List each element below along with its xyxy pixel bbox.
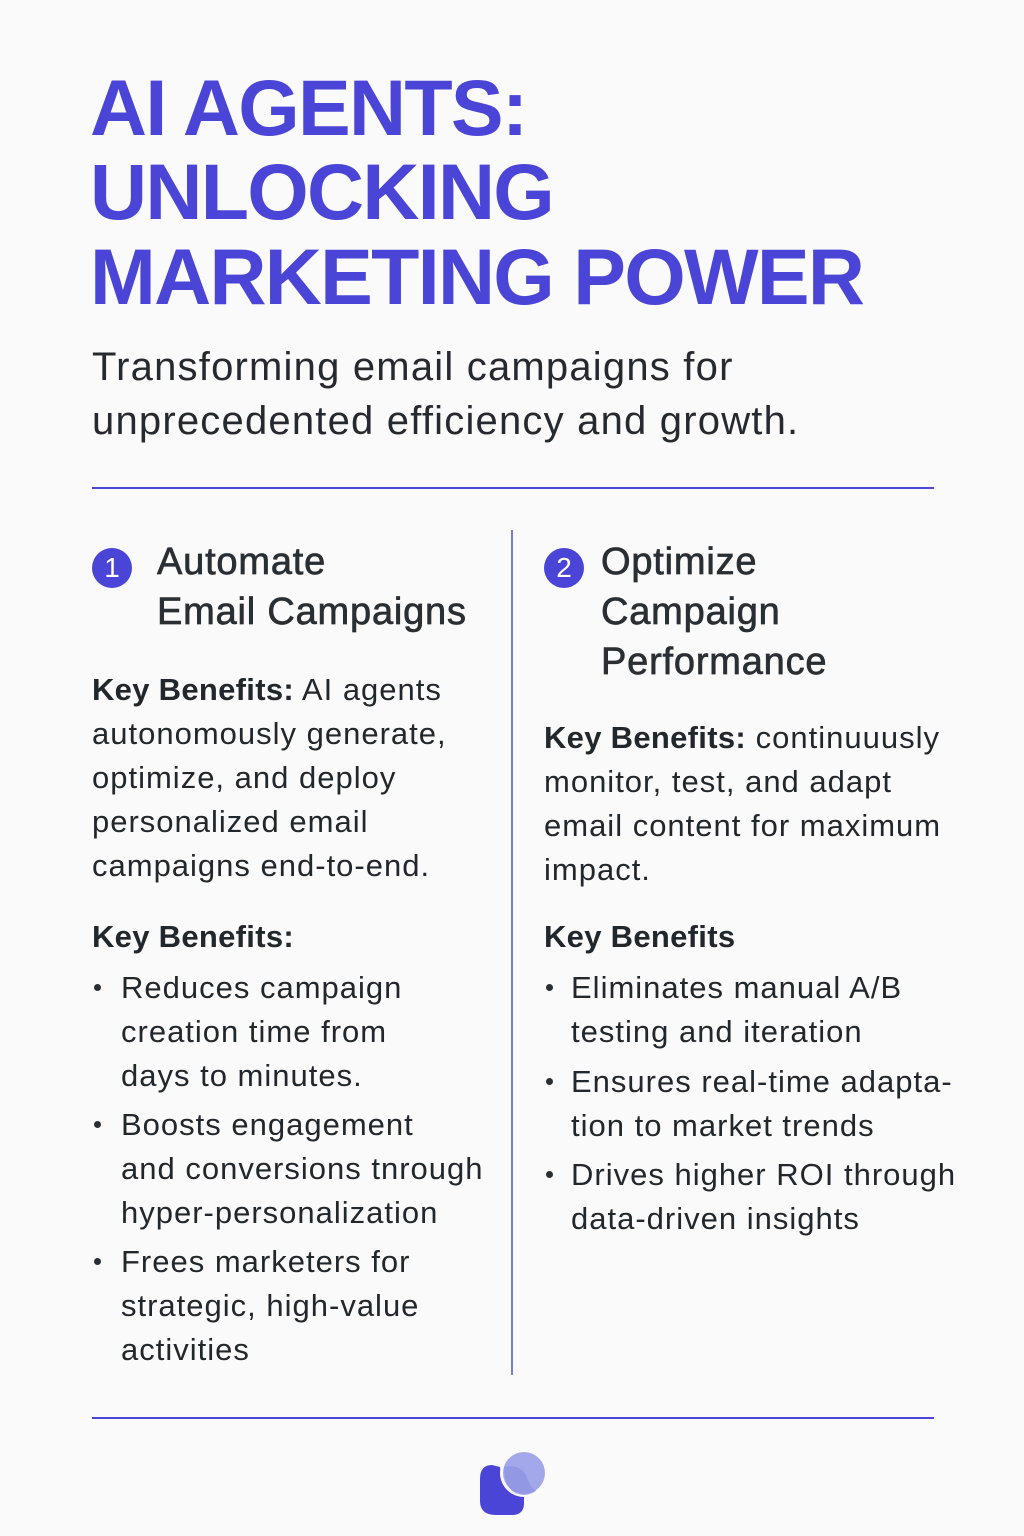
icon: logo bbox=[480, 1452, 545, 1515]
bullet list 2 bbox=[546, 970, 956, 1236]
icon: number 1: 1 bbox=[104, 552, 120, 583]
description 2 bbox=[544, 720, 941, 887]
bullet list 1: hyper-personalization bbox=[121, 1195, 438, 1230]
bullet list 2: testing and iteration bbox=[571, 1014, 863, 1049]
icon: number 2 bbox=[544, 548, 584, 588]
heading 2: Performance bbox=[601, 641, 827, 683]
bullet list 1: Reduces campaign bbox=[121, 970, 402, 1005]
description 1: campaigns end-to-end. bbox=[92, 848, 430, 883]
description 1: autonomously generate, bbox=[92, 716, 447, 751]
subtitle: unprecedented efficiency and growth. bbox=[92, 399, 799, 443]
description 2: Key Benefits: continuuusly bbox=[544, 720, 940, 755]
bullet list 1: and conversions tnrough bbox=[121, 1151, 484, 1186]
title: UNLOCKING bbox=[90, 147, 553, 236]
heading 2: Campaign bbox=[601, 591, 781, 633]
bullet list 1: strategic, high-value bbox=[121, 1288, 419, 1323]
description 2: email content for maximum bbox=[544, 808, 941, 843]
description 2: monitor, test, and adapt bbox=[544, 764, 892, 799]
subtitle: Transforming email campaigns for bbox=[92, 345, 734, 389]
subheading 1: Key Benefits: bbox=[92, 919, 294, 954]
title: AI AGENTS: bbox=[90, 63, 527, 152]
heading 2: Optimize bbox=[601, 541, 757, 583]
title: MARKETING POWER bbox=[90, 232, 863, 321]
title bbox=[90, 63, 864, 321]
description 2: impact. bbox=[544, 852, 651, 887]
bullet list 2: data-driven insights bbox=[571, 1201, 860, 1236]
bullet list 1: days to minutes. bbox=[121, 1058, 363, 1093]
description 1: optimize, and deploy bbox=[92, 760, 396, 795]
description 1 bbox=[92, 672, 447, 883]
icon: number 1 bbox=[92, 548, 132, 588]
heading 2 bbox=[601, 541, 827, 683]
bullet list 1: Boosts engagement bbox=[121, 1107, 414, 1142]
description 1: Key Benefits: AI agents bbox=[92, 672, 442, 707]
bullet list 1: creation time from bbox=[121, 1014, 387, 1049]
bullet list 2: Drives higher ROI through bbox=[571, 1157, 956, 1192]
panel: optimize campaign performance bbox=[544, 541, 956, 1236]
bullet list 1: activities bbox=[121, 1332, 250, 1367]
description 1: personalized email bbox=[92, 804, 368, 839]
subheading 2: Key Benefits bbox=[544, 919, 735, 954]
heading 1 bbox=[156, 541, 467, 633]
heading 1: Automate bbox=[157, 541, 326, 583]
panel: automate email campaigns bbox=[92, 541, 484, 1367]
bullet list 2: Eliminates manual A/B bbox=[571, 970, 902, 1005]
bullet list 1 bbox=[94, 970, 484, 1367]
bullet list 2: Ensures real-time adapta- bbox=[571, 1064, 953, 1099]
subtitle bbox=[92, 345, 799, 443]
bullet list 2: tion to market trends bbox=[571, 1108, 875, 1143]
icon: number 2: 2 bbox=[556, 552, 572, 583]
bullet list 1: Frees marketers for bbox=[121, 1244, 410, 1279]
heading 1: Email Campaigns bbox=[157, 591, 467, 633]
